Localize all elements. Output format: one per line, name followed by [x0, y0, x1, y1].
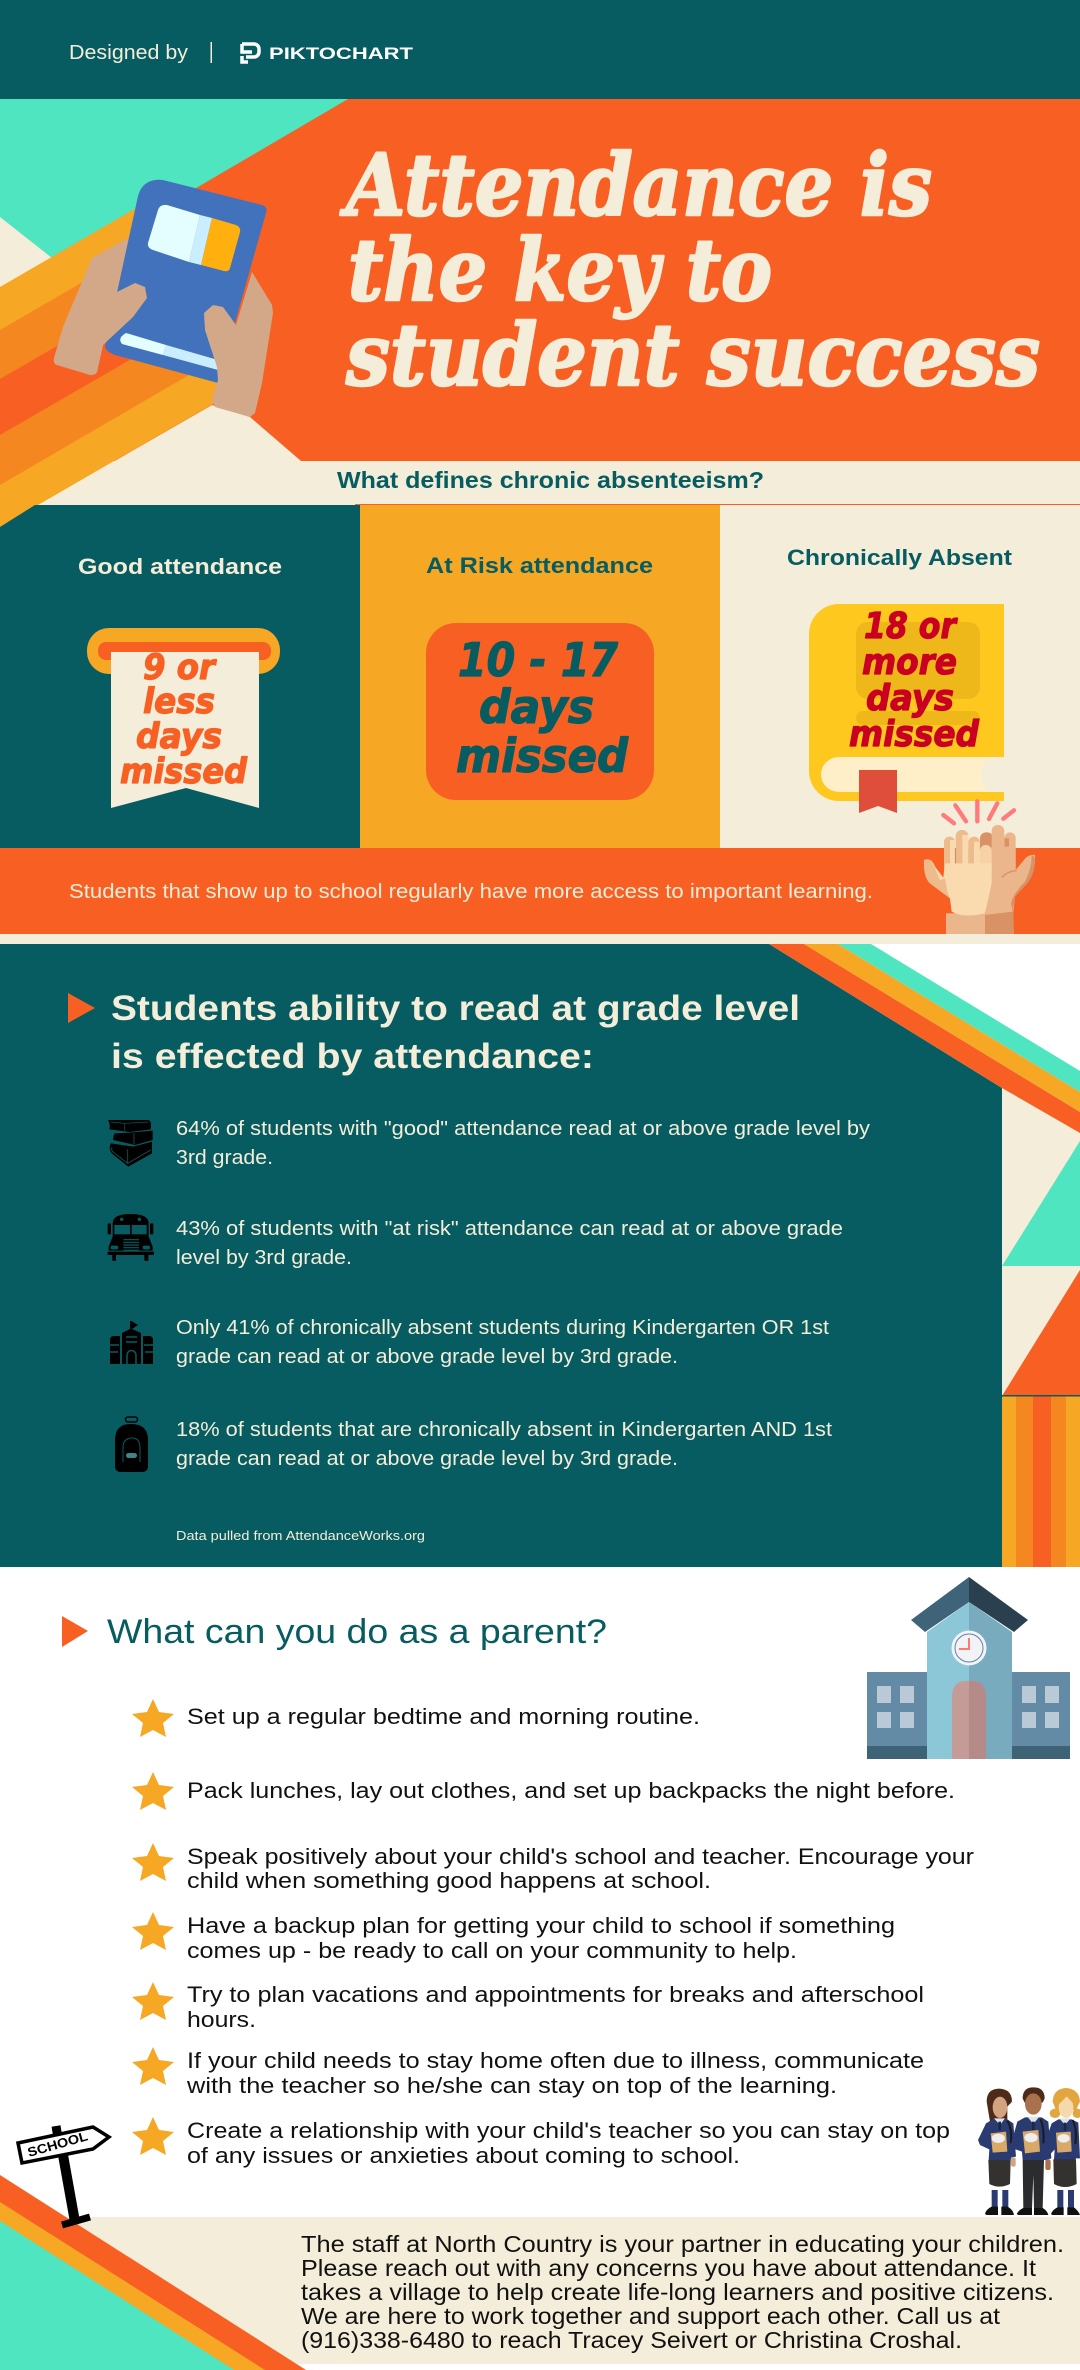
list item: illness communication: If your child needs to stay home often due to illness, communicate: [187, 2048, 924, 2073]
closing message: takes a village to help create life-long learners and positive citizens.: [301, 2279, 1054, 2305]
days missed text: 18 or: [864, 606, 958, 647]
icon: school building with clock tower: [867, 1577, 1070, 1759]
text: kindergarten and first grade statistic: grade can read at or above grade level by 3rd grade.: [176, 1448, 678, 1470]
icon: books: [108, 1120, 153, 1167]
list item: teacher relationship: of any issues or anxieties about coming to school.: [187, 2143, 740, 2168]
icon: school building: [110, 1321, 153, 1364]
list item: backup plan: [132, 1912, 895, 1963]
icon: book: [809, 604, 1004, 813]
banner: regular attendance message: Students that show up to school regularly have more access to important learning.: [69, 881, 873, 903]
section heading: [111, 989, 800, 1076]
student one: [978, 2089, 1016, 2215]
text: kindergarten and first grade statistic: 18% of students that are chronically absent in Kindergarten AND 1st: [176, 1419, 832, 1441]
header bar: [0, 0, 1080, 99]
icon: hands holding a book: [54, 180, 273, 417]
text: kindergarten or first grade statistic: [176, 1317, 829, 1368]
illustration: three students: [978, 2087, 1080, 2215]
list item: speak positively: child when something good happens at school.: [187, 1868, 711, 1893]
title: student success: [345, 306, 1040, 406]
panel: good attendance: [0, 505, 360, 848]
title: the key to: [348, 221, 772, 321]
panel: chronically absent: [720, 505, 1080, 848]
text: good attendance statistic: 3rd grade.: [176, 1147, 273, 1169]
list item: plan vacations: Try to plan vacations and appointments for breaks and afterschool: [187, 1982, 924, 2007]
days missed text: 9 or: [143, 648, 218, 688]
list item: pack the night before: [132, 1772, 955, 1810]
icon: school sign: [18, 2126, 109, 2225]
panel: at risk attendance: [360, 505, 720, 848]
days missed text: less: [143, 682, 215, 722]
days missed text: missed: [456, 729, 629, 783]
subheading: chronic absenteeism: What defines chronic absenteeism?: [337, 467, 764, 493]
list item: backup plan: Have a backup plan for getting your child to school if something: [187, 1913, 895, 1938]
days missed text: days: [866, 678, 954, 719]
section heading: What can you do as a parent?: [107, 1613, 607, 1651]
days missed text: missed: [849, 714, 980, 755]
decorative side panel: [769, 944, 1080, 1567]
closing message: (916)338-6480 to reach Tracey Seivert or Christina Croshal.: [301, 2327, 962, 2353]
icon: ribbon scroll: [87, 628, 280, 808]
closing message: We are here to work together and support each other. Call us at: [301, 2303, 1001, 2329]
arrow: [62, 1616, 88, 1647]
list item: bedtime routine: Set up a regular bedtime and morning routine.: [187, 1704, 700, 1729]
text: kindergarten and first grade statistic: [176, 1419, 832, 1470]
icon: school sign: SCHOOL: [26, 2128, 89, 2160]
column heading: At Risk attendance: [426, 553, 653, 578]
days missed text: [120, 648, 248, 792]
icon: backpack: [115, 1417, 148, 1472]
list item: speak positively: [132, 1843, 974, 1893]
days missed text: more: [862, 642, 957, 683]
column heading: Chronically Absent: [787, 545, 1013, 570]
list item: backup plan: comes up - be ready to call on your community to help.: [187, 1938, 797, 1963]
student two: [1011, 2087, 1051, 2215]
section heading: is effected by attendance:: [111, 1037, 594, 1076]
student three: [1045, 2088, 1080, 2215]
source note: Data pulled from AttendanceWorks.org: [176, 1528, 425, 1543]
text: kindergarten or first grade statistic: Only 41% of chronically absent students during Kindergarten OR 1st: [176, 1317, 829, 1339]
arrow: [68, 993, 95, 1023]
closing message: Please reach out with any concerns you have about attendance. It: [301, 2255, 1037, 2281]
list item: speak positively: Speak positively about your child's school and teacher. Encourage your: [187, 1844, 974, 1869]
text: at risk statistic: level by 3rd grade.: [176, 1247, 352, 1269]
list item: pack the night before: Pack lunches, lay out clothes, and set up backpacks the night before.: [187, 1778, 955, 1803]
days missed text: [456, 633, 629, 783]
days missed text: 10 - 17: [458, 633, 618, 687]
icon: high five hands: [924, 801, 1035, 934]
badge: [426, 623, 654, 800]
list item: teacher relationship: Create a relationship with your child's teacher so you can stay on top: [187, 2118, 950, 2143]
list item: illness communication: [132, 2047, 924, 2098]
text: at risk statistic: [176, 1218, 843, 1269]
icon: school bus: [108, 1214, 154, 1261]
panel: reading at grade level: [0, 944, 1080, 1567]
hero panel: [0, 99, 1080, 527]
closing message: The staff at North Country is your partner in educating your children.: [301, 2231, 1064, 2257]
list item: bedtime routine: [132, 1699, 700, 1737]
days missed text: [849, 606, 980, 755]
closing message: [301, 2231, 1064, 2353]
list item: teacher relationship: [132, 2117, 950, 2168]
list item: illness communication: with the teacher so he/she can stay on top of the learning.: [186, 2073, 837, 2098]
section heading: Students ability to read at grade level: [111, 989, 800, 1028]
column heading: Good attendance: [78, 554, 282, 579]
list item: plan vacations: hours.: [187, 2007, 256, 2032]
text: good attendance statistic: 64% of students with "good" attendance read at or above grade level by: [176, 1118, 870, 1140]
title: [340, 136, 1040, 406]
title: Attendance is: [340, 136, 932, 236]
header bar: PIKTOCHART: [269, 44, 414, 63]
banner: regular attendance message: [0, 848, 1080, 944]
days missed text: days: [136, 717, 222, 757]
text: good attendance statistic: [176, 1118, 870, 1169]
footer panel: [0, 2175, 1080, 2370]
days missed text: missed: [120, 752, 248, 792]
panel: what parents can do: [62, 1577, 1070, 2168]
text: kindergarten or first grade statistic: grade can read at or above grade level by 3rd grade.: [176, 1346, 678, 1368]
text: at risk statistic: 43% of students with "at risk" attendance can read at or above grade: [176, 1218, 843, 1240]
days missed text: days: [479, 680, 594, 734]
header bar: Designed by: [69, 42, 188, 64]
list item: plan vacations: [132, 1982, 924, 2032]
